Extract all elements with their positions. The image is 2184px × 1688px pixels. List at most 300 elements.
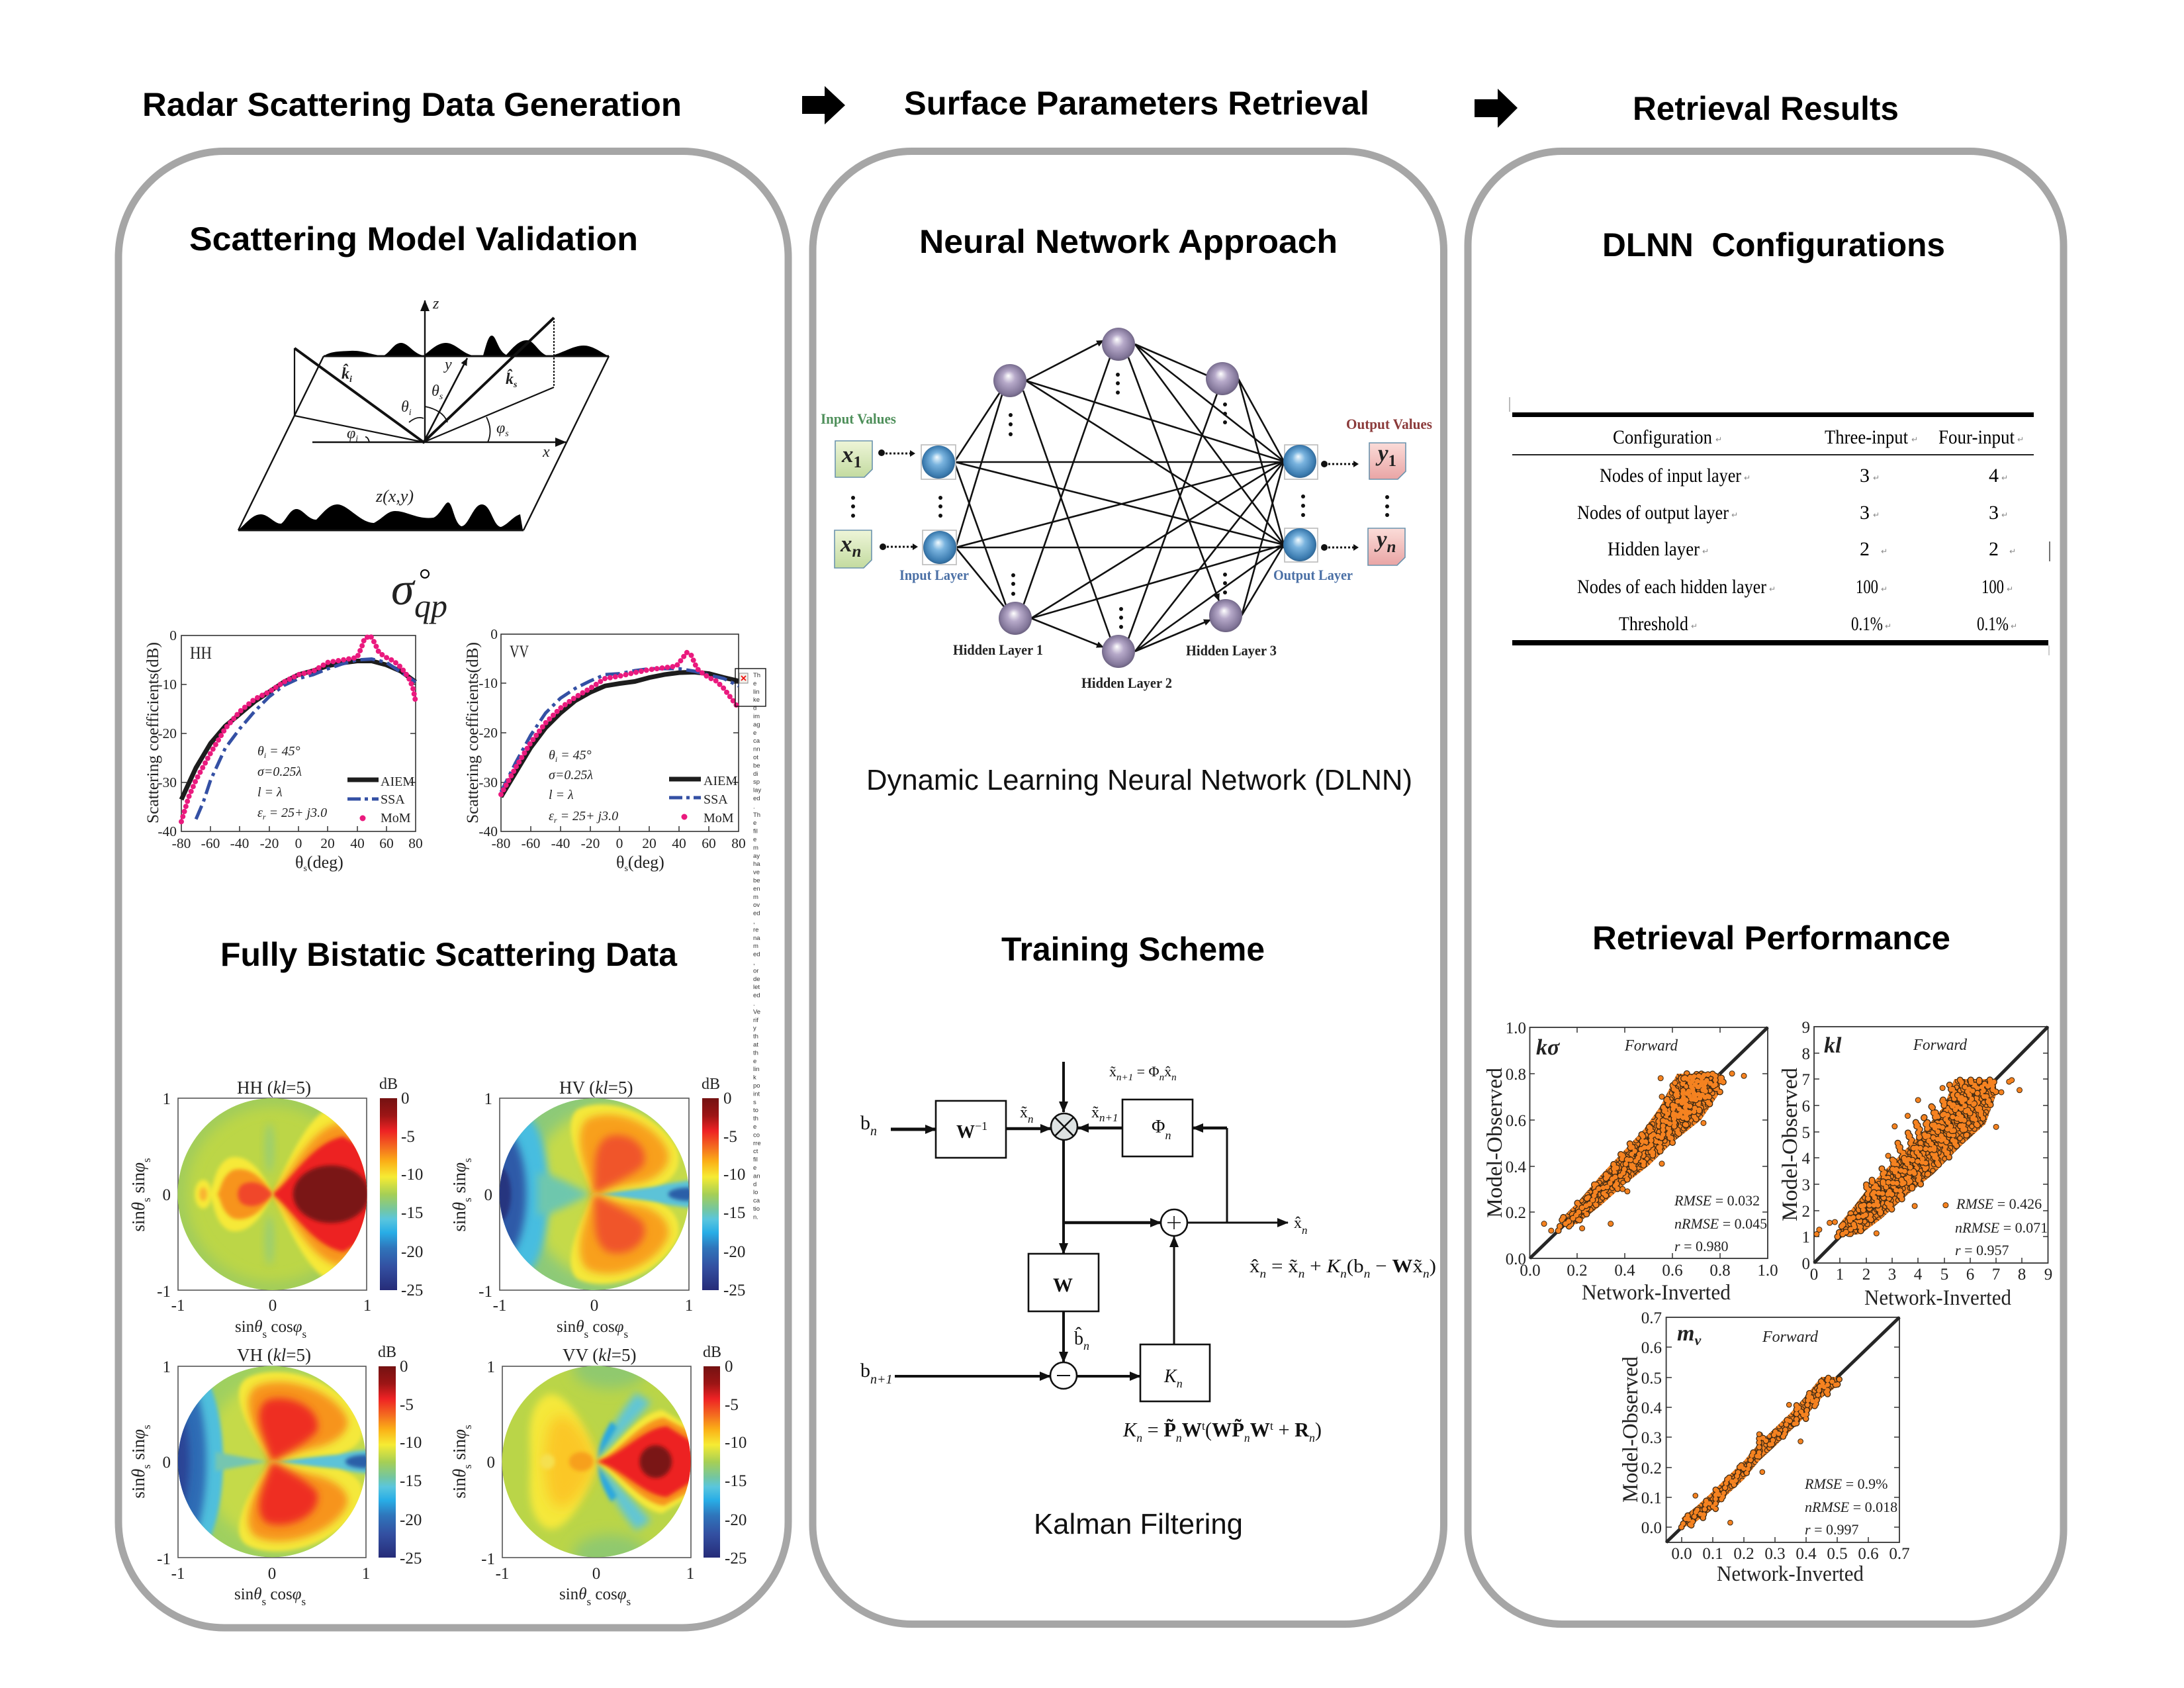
broken image placeholder box: co <box>753 1131 760 1139</box>
broken image placeholder box: ed <box>753 951 760 959</box>
line chart: VV scattering coefficients <box>464 626 746 874</box>
block diagram labels <box>860 1063 1436 1444</box>
block diagram labels: t <box>1202 1419 1205 1432</box>
table: DLNN configurations: Nodes of input layer <box>1600 465 1741 487</box>
scatter plot: k sigma: RMSE = 0.032 <box>1674 1192 1760 1209</box>
heatmap: HH: -20 <box>401 1243 423 1261</box>
scatter plot: k l: 3 <box>1888 1266 1896 1284</box>
heatmap: VH: 0 <box>400 1358 408 1376</box>
block diagram labels: = Φ <box>1133 1063 1160 1080</box>
line chart: HH scattering coefficients: 40 <box>350 835 365 851</box>
block diagram labels: WP̃ <box>1212 1418 1244 1441</box>
scatter plot: k sigma: Model-Observed <box>1483 1067 1507 1218</box>
block diagram labels: x̂ <box>1250 1256 1259 1277</box>
diagram: rough surface scattering geometry: k̂ <box>506 371 514 388</box>
broken image placeholder box: int <box>753 1090 760 1098</box>
broken image placeholder box: na <box>753 935 760 942</box>
heatmap: VV: -1 <box>496 1565 509 1583</box>
block diagram labels: (b <box>1347 1256 1364 1277</box>
scatter plot: k l: nRMSE = 0.071 <box>1955 1219 2048 1236</box>
dotted value arrows <box>878 449 1359 551</box>
subtract junction <box>1050 1362 1077 1389</box>
heatmap: VH: -1 <box>157 1550 171 1568</box>
heatmap: VH: -5 <box>400 1396 414 1414</box>
line chart: VV scattering coefficients: θ <box>549 748 555 763</box>
scatter plot: m v: 0.4 <box>1641 1399 1662 1417</box>
heatmap: HV: s <box>584 1328 588 1340</box>
heatmap: VH: s <box>140 1464 153 1469</box>
heatmap: VV: 0 <box>487 1454 495 1472</box>
block diagram labels: R <box>1295 1418 1310 1441</box>
line chart: HH scattering coefficients: ε <box>257 806 263 820</box>
broken image placeholder box: e <box>753 820 756 827</box>
broken image placeholder box <box>735 669 766 1221</box>
scatter plot: k sigma: 0.2 <box>1567 1262 1588 1280</box>
broken image placeholder box: d <box>753 705 756 712</box>
line chart: VV scattering coefficients: r <box>554 816 557 825</box>
table: DLNN configurations: ↵ <box>1873 473 1880 483</box>
scatter plot: k l: 9 <box>2044 1266 2052 1284</box>
block diagram labels: n <box>870 1124 877 1139</box>
block diagram labels: ) <box>1315 1418 1322 1441</box>
broken image placeholder box: ct <box>753 1148 758 1155</box>
scatter plot: k l: 9 <box>1801 1019 1810 1037</box>
broken image placeholder box: e <box>753 1058 756 1065</box>
output value note icons: n <box>1387 538 1396 556</box>
heatmap: HV: φ <box>449 1162 469 1172</box>
scatter plot: m v: 0.0 <box>1671 1545 1692 1563</box>
broken image placeholder box: ag <box>753 721 760 728</box>
output value note icons <box>1368 440 1406 565</box>
heatmap: VV: VV (kl=5) <box>563 1345 636 1365</box>
table: DLNN configurations: ↵ <box>1691 622 1698 631</box>
diagram: rough surface scattering geometry: θ <box>401 399 409 416</box>
broken image placeholder box: im <box>753 713 760 720</box>
scatter plot: k l: 2 <box>1801 1203 1810 1221</box>
block diagram labels: n <box>1083 1339 1089 1352</box>
network labels: Hidden Layer 1 <box>953 641 1043 658</box>
table: DLNN configurations: Nodes of each hidden layer <box>1577 576 1766 598</box>
broken image placeholder box: lo <box>753 1189 758 1196</box>
scatter plot: k l: 4 <box>1801 1150 1811 1168</box>
block diagram labels: b̂ <box>1074 1329 1083 1349</box>
line chart: HH scattering coefficients: 0 <box>169 628 177 643</box>
scatter plot: m v: v <box>1694 1332 1701 1348</box>
line chart: HH scattering coefficients: -80 <box>172 835 191 851</box>
scatter plot: k l: 8 <box>2018 1266 2026 1284</box>
scatter plot: k sigma: Forward <box>1624 1037 1678 1055</box>
line chart: VV scattering coefficients: l = λ <box>549 788 574 802</box>
scatter plot: m v: 0.2 <box>1733 1545 1754 1563</box>
network labels: Output Layer <box>1273 567 1353 583</box>
block diagram labels: b <box>860 1112 870 1134</box>
caption: dynamic learning neural network: Dynamic Learning Neural Network (DLNN) <box>866 764 1412 796</box>
scatter plot: k l: 5 <box>1801 1124 1810 1142</box>
broken image placeholder box: Th <box>753 812 760 819</box>
heatmap: HV: 1 <box>484 1090 492 1108</box>
table: DLNN configurations: ↵ <box>1881 585 1888 594</box>
heatmap: VV: sinθ <box>449 1469 469 1499</box>
broken image placeholder box: sp <box>753 778 760 786</box>
line chart: HH scattering coefficients: -20 <box>158 726 177 741</box>
scatter plot: m v: r = 0.997 <box>1805 1521 1858 1538</box>
heatmap: HV: sinθ <box>449 1202 469 1232</box>
table: DLNN configurations: ↵ <box>2007 585 2013 594</box>
scatter plot: k l: 4 <box>1914 1266 1923 1284</box>
heatmap: VH: 1 <box>163 1358 171 1376</box>
table: DLNN configurations: ↵ <box>1769 585 1776 594</box>
line chart: HH scattering coefficients: = 25+ j3.0 <box>266 806 327 820</box>
scatter plot: k sigma: 0.8 <box>1506 1066 1526 1084</box>
line chart: HH scattering coefficients: -30 <box>158 774 177 790</box>
line chart: VV scattering coefficients: σ=0.25λ <box>549 768 593 782</box>
heatmap: HV: -1 <box>493 1297 506 1315</box>
scatter plot: m v: Model-Observed <box>1619 1356 1643 1503</box>
heatmap: HH: sin <box>128 1172 148 1197</box>
broken image placeholder box: , <box>753 918 755 925</box>
line chart: HH scattering coefficients: 60 <box>379 835 394 851</box>
scatter plot: m v: 0.0 <box>1641 1519 1662 1537</box>
block diagram labels: K <box>1326 1256 1342 1277</box>
scatter plot: k l: 5 <box>1940 1266 1948 1284</box>
heatmap: VH: 0 <box>268 1565 276 1583</box>
heatmap: VV: -25 <box>725 1550 747 1568</box>
block diagram labels: x̃ <box>1109 1063 1116 1080</box>
line chart: HH scattering coefficients: AIEM <box>381 774 414 789</box>
block diagram labels: n <box>1364 1267 1370 1280</box>
table: DLNN configurations: 0.1% <box>1851 613 1883 635</box>
hidden layer nodes <box>993 328 1242 668</box>
block diagram labels: n <box>1309 1431 1315 1444</box>
broken image placeholder box: ve <box>753 869 760 876</box>
broken image placeholder box: k <box>753 1074 756 1082</box>
diagram: rough surface scattering geometry: z <box>432 295 439 312</box>
broken image placeholder box: e <box>753 1164 756 1172</box>
scatter plot: k sigma: 0.6 <box>1662 1262 1683 1280</box>
scatter plot: k sigma: nRMSE = 0.045 <box>1674 1215 1767 1232</box>
heatmap: HH: 0 <box>401 1090 409 1107</box>
multiply junction <box>1051 1113 1077 1140</box>
line chart: HH scattering coefficients: = 45° <box>266 744 300 759</box>
block diagram labels: ) <box>1430 1256 1436 1277</box>
line chart: HH scattering coefficients: Scattering coefficients(dB) <box>144 642 162 823</box>
line chart: HH scattering coefficients: i <box>264 751 266 760</box>
arrow: step one to step two <box>802 86 845 124</box>
broken image placeholder box: e <box>753 836 756 843</box>
heatmap: HV: sinθ <box>557 1318 584 1336</box>
table: DLNN configurations: 100 <box>1856 576 1878 598</box>
broken image placeholder box: re <box>753 926 758 933</box>
line chart: VV scattering coefficients: -20 <box>581 835 600 851</box>
scatter plot: m v: m <box>1677 1321 1694 1346</box>
scatter plot: k l: 6 <box>1801 1098 1810 1115</box>
heatmap: VV: s <box>586 1595 591 1608</box>
heatmap: VH: s <box>140 1425 153 1429</box>
line chart: HH scattering coefficients: HH <box>190 643 212 663</box>
input value note icons: n <box>852 543 861 561</box>
table: DLNN configurations: 3 <box>1860 465 1870 487</box>
scatter plot: m v: Forward <box>1762 1329 1819 1346</box>
line chart: HH scattering coefficients: -20 <box>260 835 279 851</box>
block diagram labels: P̃ <box>1163 1418 1176 1441</box>
heatmap: HH: φ <box>293 1318 302 1336</box>
block diagram labels: n <box>1340 1267 1347 1280</box>
line chart: VV scattering coefficients: -30 <box>478 774 498 790</box>
table: DLNN configurations: Three-input <box>1825 426 1909 448</box>
scatter plot: k l: RMSE = 0.426 <box>1956 1196 2042 1212</box>
broken image placeholder box: ov <box>753 902 760 909</box>
line chart: HH scattering coefficients: MoM <box>381 811 411 825</box>
output value note icons: y <box>1377 526 1387 552</box>
network labels: Input Layer <box>899 567 969 583</box>
line chart: VV scattering coefficients: = 25+ j3.0 <box>557 809 618 823</box>
broken image placeholder box: e <box>753 729 756 737</box>
broken image placeholder box: en <box>753 885 760 892</box>
broken image placeholder box: be <box>753 877 760 884</box>
table: DLNN configurations: ↵ <box>1715 435 1722 444</box>
broken image placeholder box: ca <box>753 1197 760 1205</box>
scatter plot: k l: 7 <box>1992 1266 2000 1284</box>
heatmap: HH: -15 <box>401 1204 423 1222</box>
broken image placeholder box: or <box>753 967 758 974</box>
heatmap: VV: 1 <box>686 1565 694 1583</box>
diagram: rough surface scattering geometry: k̂ <box>341 365 349 383</box>
panel: radar scattering data generation <box>118 151 788 1628</box>
input value note icons: 1 <box>854 453 862 471</box>
line chart: VV scattering coefficients: -40 <box>551 835 570 851</box>
scatter plot: k l: Network-Inverted <box>1864 1286 2011 1310</box>
table: DLNN configurations: 100 <box>1981 576 2004 598</box>
heatmap: HV: -20 <box>723 1243 745 1261</box>
heatmap: VV: s <box>627 1595 631 1608</box>
line chart: VV scattering coefficients: VV <box>510 642 529 661</box>
broken image placeholder box: . <box>753 803 755 810</box>
scatter plot: k sigma: 1.0 <box>1757 1262 1778 1280</box>
heatmap: VH: -25 <box>400 1550 422 1568</box>
heading: retrieval results: Retrieval Results <box>1633 90 1899 127</box>
block diagram labels: Wx̃ <box>1392 1256 1422 1277</box>
heatmap: HH: HH (kl=5) <box>237 1078 311 1098</box>
broken image placeholder box: de <box>753 976 760 983</box>
heading: fully bistatic scattering data: Fully Bistatic Scattering Data <box>220 936 678 973</box>
heatmap: HV <box>449 1076 745 1340</box>
table: DLNN configurations: ↵ <box>2017 435 2024 444</box>
scatter plot: m v <box>1619 1309 1910 1586</box>
line chart: VV scattering coefficients: 80 <box>731 835 746 851</box>
panel: retrieval results <box>1468 151 2064 1624</box>
block diagram labels: K <box>1122 1418 1138 1441</box>
scatter plot: k sigma: 0.6 <box>1506 1112 1526 1130</box>
block diagram labels: b <box>860 1360 870 1382</box>
heatmap: HH: -10 <box>401 1166 423 1184</box>
heatmap: VH: VH (kl=5) <box>237 1345 311 1365</box>
broken image placeholder box: s <box>753 1099 756 1106</box>
diagram: rough surface scattering geometry: φ <box>496 420 505 437</box>
broken image placeholder box: th <box>753 1049 758 1056</box>
scatter plot: m v: 0.6 <box>1641 1339 1662 1357</box>
block diagram labels: x̃ <box>1020 1104 1028 1121</box>
network labels: Output Values <box>1346 416 1432 432</box>
broken image placeholder box: di <box>753 771 758 778</box>
scatter plot: m v: 0.2 <box>1641 1460 1662 1477</box>
line chart: VV scattering coefficients: AIEM <box>704 774 737 788</box>
line chart: HH scattering coefficients: -40 <box>230 835 249 851</box>
block diagram labels: n <box>1160 1072 1164 1083</box>
line chart: HH scattering coefficients: 80 <box>408 835 423 851</box>
scatter plot: k l: 0 <box>1810 1266 1818 1284</box>
heatmap: VH <box>128 1344 422 1608</box>
line chart: VV scattering coefficients: i <box>555 755 557 764</box>
broken image placeholder box: m <box>753 844 758 851</box>
table: DLNN configurations: ↵ <box>2001 473 2008 483</box>
line chart: HH scattering coefficients: 0 <box>295 835 302 851</box>
heatmap: HV: s <box>624 1328 628 1340</box>
scatter plot: k l: 6 <box>1966 1266 1974 1284</box>
scatter plot: m v: 0.4 <box>1796 1545 1817 1563</box>
block diagram labels: −1 <box>975 1119 987 1133</box>
broken image placeholder box: e <box>753 680 756 687</box>
scatter plot: k l: Model-Observed <box>1778 1067 1802 1221</box>
block diagram labels: n <box>1260 1267 1266 1280</box>
line chart: VV scattering coefficients: 0 <box>490 626 498 642</box>
heatmap: HV: 0 <box>484 1186 492 1204</box>
broken image placeholder box: . <box>753 1000 755 1008</box>
scatter plot: k l: 0 <box>1801 1255 1810 1273</box>
heatmap: VH: cos <box>266 1585 293 1603</box>
scatter plot: m v: 0.3 <box>1641 1429 1662 1447</box>
heading: DLNN configurations: DLNN Configurations <box>1602 226 1945 263</box>
block diagram labels: n <box>1136 1431 1142 1444</box>
line chart: HH scattering coefficients: SSA <box>381 792 405 807</box>
scatter plot: k l: 2 <box>1862 1266 1870 1284</box>
broken image placeholder box: ed <box>753 795 760 802</box>
heatmap: VV: sin <box>449 1438 469 1464</box>
heatmap: VH: dB <box>378 1344 396 1361</box>
heatmap: HH: -1 <box>157 1283 171 1301</box>
block diagram labels: t <box>1270 1419 1273 1432</box>
scatter plot: m v: 0.1 <box>1641 1489 1662 1507</box>
heatmap: VV: sinθ <box>559 1585 586 1603</box>
scatter plot: k sigma: 0.0 <box>1506 1250 1526 1268</box>
symbol: sigma naught qp: qp <box>414 587 447 624</box>
line chart: VV scattering coefficients: 60 <box>702 835 716 851</box>
line chart: HH scattering coefficients: r <box>263 812 266 821</box>
line chart: VV scattering coefficients: SSA <box>704 792 728 807</box>
heatmap: VV: s <box>461 1464 474 1469</box>
broken image placeholder box: d <box>753 1181 756 1188</box>
line chart: HH scattering coefficients: (deg) <box>307 853 343 872</box>
heading: surface parameters retrieval: Surface Parameters Retrieval <box>904 85 1369 122</box>
block diagram labels: n <box>1028 1113 1034 1125</box>
heatmap: VH: sinθ <box>234 1585 261 1603</box>
heatmap: VV: -10 <box>725 1434 747 1452</box>
heatmap: HH: -25 <box>401 1282 423 1299</box>
table: DLNN configurations: Threshold <box>1619 613 1688 635</box>
diagram: rough surface scattering geometry: y <box>443 356 452 373</box>
heatmap: VV: dB <box>703 1344 721 1361</box>
table: DLNN configurations: ↵ <box>1873 510 1880 520</box>
line chart: VV scattering coefficients: -40 <box>478 823 498 839</box>
line chart: VV scattering coefficients: s <box>624 864 628 874</box>
heatmap: HV: -5 <box>723 1128 737 1146</box>
heatmap: VV: -5 <box>725 1396 739 1414</box>
scatter plot: k l: 8 <box>1801 1045 1810 1063</box>
line chart: VV scattering coefficients: ε <box>549 809 554 823</box>
broken image placeholder box: y <box>753 1025 756 1032</box>
block diagram labels: W <box>1182 1418 1202 1441</box>
heatmap: HH: φ <box>128 1162 148 1172</box>
table: DLNN configurations: ↵ <box>2011 622 2017 631</box>
scatter plot: m v: Network-Inverted <box>1717 1562 1864 1586</box>
block diagram labels: = x̃ <box>1266 1256 1298 1277</box>
scatter plot: m v: nRMSE = 0.018 <box>1805 1499 1897 1515</box>
heading: radar scattering data generation: Radar Scattering Data Generation <box>142 86 682 123</box>
line chart: HH scattering coefficients: θ <box>257 744 264 759</box>
heatmap: HV: -25 <box>723 1282 745 1299</box>
line chart: HH scattering coefficients: -60 <box>201 835 220 851</box>
block diagram labels: − <box>1370 1256 1392 1277</box>
diagram: rough surface scattering geometry: i <box>355 434 358 444</box>
input layer nodes <box>922 445 956 564</box>
network labels: Hidden Layer 2 <box>1081 675 1172 691</box>
scatter plot: m v: 0.5 <box>1641 1370 1662 1387</box>
diagram: rough surface scattering geometry <box>238 295 609 530</box>
scatter plot: k l <box>1778 1019 2052 1310</box>
heatmap: HH: s <box>140 1197 153 1202</box>
heatmap: HV: s <box>461 1197 474 1202</box>
heatmap: HH: -5 <box>401 1128 415 1146</box>
block diagram labels: W <box>1053 1274 1073 1296</box>
broken image placeholder box: let <box>753 984 760 991</box>
scatter plot: k sigma: Network-Inverted <box>1582 1281 1731 1305</box>
table: DLNN configurations: ↵ <box>1702 547 1709 556</box>
block diagram labels: W <box>956 1122 975 1143</box>
heatmap: HV: -1 <box>478 1283 492 1301</box>
heading: training scheme: Training Scheme <box>1001 931 1265 968</box>
table: DLNN configurations: Hidden layer <box>1608 538 1700 560</box>
block diagram labels: K <box>1164 1366 1177 1387</box>
scatter plot: m v: RMSE = 0.9% <box>1804 1476 1888 1492</box>
line chart: HH scattering coefficients: -10 <box>158 677 177 692</box>
scatter plot: k sigma: 0.2 <box>1506 1204 1526 1222</box>
scatter plot: k l: r = 0.957 <box>1955 1242 2009 1258</box>
scatter plot: k sigma: 0.8 <box>1709 1262 1731 1280</box>
heatmap: HH: dB <box>379 1076 398 1093</box>
symbol: sigma naught qp: σ <box>391 564 416 615</box>
broken image placeholder box: Ve <box>753 1008 760 1015</box>
scatter plot: m v: 0.7 <box>1889 1545 1910 1563</box>
line chart: HH scattering coefficients: σ=0.25λ <box>257 765 302 779</box>
heading: neural network approach: Neural Network Approach <box>919 223 1338 260</box>
scatter plot: k sigma <box>1483 1019 1778 1305</box>
broken image placeholder box: po <box>753 1082 760 1090</box>
broken image placeholder box: ca <box>753 737 760 745</box>
heatmap: HV: 1 <box>685 1297 693 1315</box>
broken image placeholder box: rif <box>753 1017 758 1024</box>
scatter plot: k l: 1 <box>1801 1229 1810 1246</box>
broken image placeholder box: rre <box>753 1140 761 1147</box>
heatmap: HH <box>128 1076 423 1340</box>
block diagram labels: n+1 <box>1099 1111 1118 1124</box>
line chart: HH scattering coefficients: θ <box>295 853 303 872</box>
heatmap: HV: HV (kl=5) <box>559 1078 633 1098</box>
block diagram labels: n <box>1298 1267 1304 1280</box>
broken image placeholder box: th <box>753 1033 758 1041</box>
output layer nodes <box>1283 445 1316 561</box>
line chart: VV scattering coefficients: -20 <box>478 725 498 741</box>
heatmap: VV: -20 <box>725 1511 747 1529</box>
heatmap: VV: 1 <box>487 1358 495 1376</box>
